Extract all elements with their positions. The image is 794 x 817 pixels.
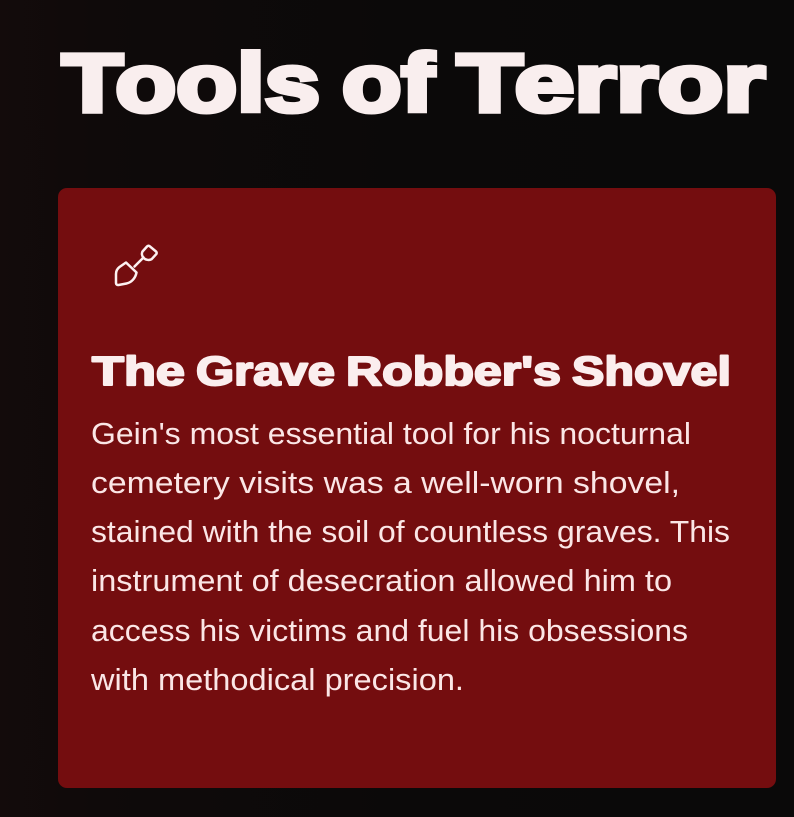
heading: Robber's [346, 348, 561, 394]
body text: stained with the soil of countless graves. This [91, 514, 730, 549]
title [62, 38, 765, 129]
title: of [342, 38, 435, 129]
title: Tools [62, 38, 320, 129]
heading: Grave [196, 348, 335, 394]
body text: Gein's most essential tool for his nocturnal [91, 416, 691, 451]
heading [92, 348, 731, 394]
icon: shovel [116, 246, 157, 285]
heading: The [92, 348, 185, 394]
panel: grave robber's shovel [58, 188, 776, 788]
body text: access his victims and fuel his obsessions [91, 613, 688, 648]
title: Terror [457, 38, 765, 129]
panel background [58, 188, 776, 788]
body text [90, 416, 730, 697]
body text: instrument of desecration allowed him to [91, 563, 672, 598]
body text: cemetery visits was a well-worn shovel, [91, 465, 680, 500]
heading: Shovel [572, 348, 731, 394]
body text: with methodical precision. [90, 662, 464, 697]
